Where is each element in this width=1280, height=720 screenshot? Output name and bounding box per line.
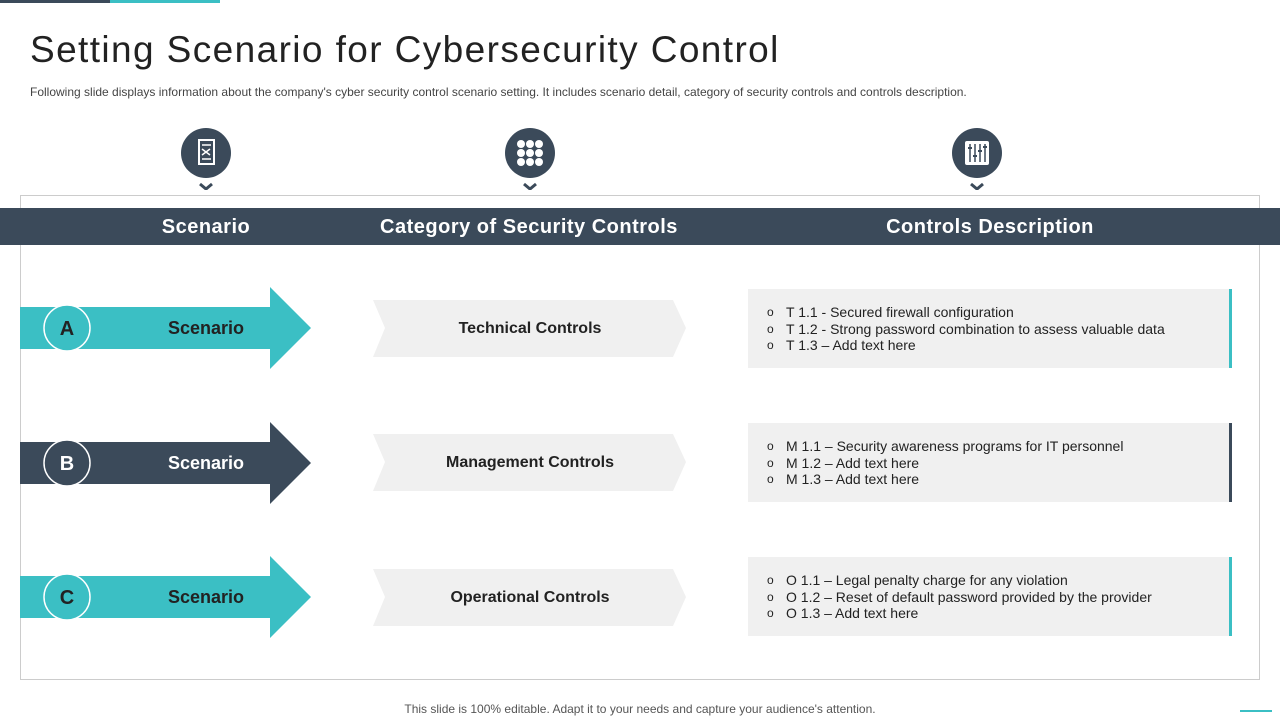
row A description: T 1.2 - Strong password combination to assess valuable data (786, 321, 1165, 337)
bottom right accent (1240, 710, 1272, 712)
row B description: M 1.1 – Security awareness programs for IT personnel (786, 438, 1123, 454)
header: controls description: Controls Description (886, 216, 1094, 238)
row A category (373, 300, 686, 357)
row B description: M 1.2 – Add text here (786, 455, 919, 471)
row B category: Management Controls (446, 454, 614, 471)
row A arrow: A (60, 318, 74, 340)
row A description: T 1.3 – Add text here (786, 337, 916, 353)
header: scenario: Scenario (162, 216, 250, 238)
row C arrow: C (60, 587, 74, 609)
row C description: O 1.3 – Add text here (786, 605, 918, 621)
icon: sliders (952, 128, 1002, 190)
row B description: M 1.3 – Add text here (786, 471, 919, 487)
header bar (0, 208, 1280, 245)
row C arrow (20, 556, 311, 638)
row B arrow: B (60, 453, 74, 475)
row C category (373, 569, 686, 626)
icon: scroll document (181, 128, 231, 190)
title: Setting Scenario for Cybersecurity Control (30, 29, 780, 70)
row A arrow (20, 287, 311, 369)
row B category (373, 434, 686, 491)
subtitle: Following slide displays information about the company's cyber security control scenario setting. It includes scenario detail, category of security controls and controls description. (30, 85, 967, 99)
footer note: This slide is 100% editable. Adapt it to your needs and capture your audience's attention. (404, 702, 876, 716)
row A category: Technical Controls (459, 320, 601, 337)
header: category: Category of Security Controls (380, 216, 678, 238)
row B arrow: Scenario (168, 453, 244, 473)
row C category: Operational Controls (450, 589, 610, 606)
row A arrow: Scenario (168, 318, 244, 338)
icon: grid dots (505, 128, 555, 190)
row C description: O 1.2 – Reset of default password provided by the provider (786, 589, 1152, 605)
frame (20, 195, 1260, 680)
row C arrow: Scenario (168, 587, 244, 607)
top accent bars (0, 0, 220, 3)
row B description (748, 423, 1232, 502)
row C description (748, 557, 1232, 636)
row A description (748, 289, 1232, 368)
row C description: O 1.1 – Legal penalty charge for any violation (786, 572, 1068, 588)
row B arrow (20, 422, 311, 504)
row A description: T 1.1 - Secured firewall configuration (786, 304, 1014, 320)
